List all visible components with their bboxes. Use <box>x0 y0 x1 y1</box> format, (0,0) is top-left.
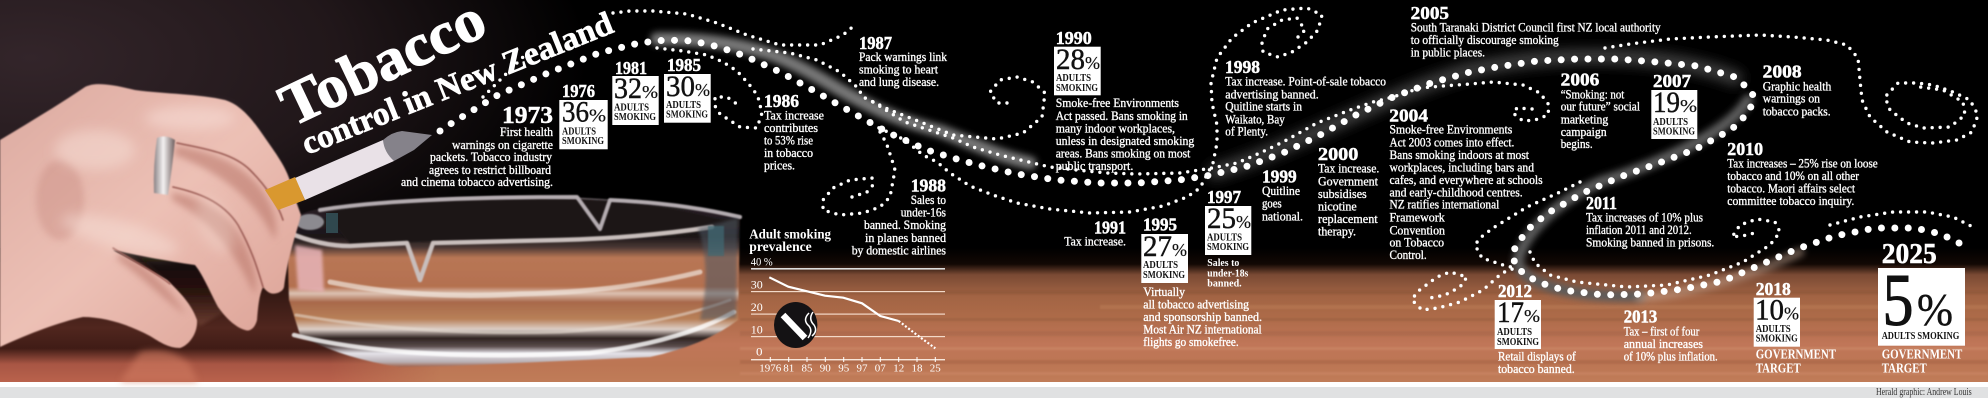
entry 1986: in tobacco <box>764 145 813 160</box>
main title <box>269 0 618 162</box>
entry 1990 with badge: areas. Bans smoking on most <box>1056 146 1191 161</box>
entry 2012 with badge: 2012 <box>1498 281 1532 301</box>
entry 1997 with badge: % <box>1236 212 1251 232</box>
entry 2013: annual increases <box>1624 336 1703 351</box>
ring <box>154 136 175 195</box>
entry 1981 with badge: ADULTS <box>614 102 649 114</box>
entry 1988: Sales to <box>911 192 946 207</box>
entry 2018 with badge: 10 <box>1755 294 1784 327</box>
entry 1973: 1973 <box>502 103 553 129</box>
entry 2006: our future” social <box>1561 99 1640 114</box>
entry 2008 <box>1763 62 1832 118</box>
entry 2013: of 10% plus inflation. <box>1624 348 1718 363</box>
dotted strand along timeline <box>873 82 1549 174</box>
entry 1998 <box>1225 57 1386 139</box>
dotted swirl lower left <box>1412 182 1580 310</box>
entry 2000: nicotine <box>1318 198 1357 213</box>
entry 1976 with badge <box>559 81 608 149</box>
entry 1987: 1987 <box>859 33 892 53</box>
entry 2004: Convention <box>1390 222 1445 237</box>
entry 2004: 2004 <box>1389 106 1428 126</box>
title line 2: control in New Zealand <box>297 6 618 162</box>
entry 1995 with badge: 1995 <box>1143 215 1177 235</box>
x axis labels: 25 <box>930 363 941 375</box>
entry 1990 with badge: Act passed. Bans smoking in <box>1056 108 1188 123</box>
x axis labels: 95 <box>838 363 850 375</box>
entry 2004: Bans smoking indoors at most <box>1390 147 1529 162</box>
y axis labels: 0 <box>756 345 762 359</box>
prevalence line actual <box>769 277 899 321</box>
dotted strand over title <box>483 11 856 97</box>
ashtray glass body <box>287 196 740 367</box>
entry 2004: Framework <box>1390 210 1445 225</box>
entry 1997 with badge: Sales to <box>1207 257 1240 269</box>
entry 1981 with badge: SMOKING <box>614 111 656 123</box>
x axis labels: 90 <box>820 363 831 375</box>
entry 2012 with badge: tobacco banned. <box>1498 361 1575 376</box>
entry 1987: and lung disease. <box>859 74 939 89</box>
entry 1981 with badge: 32 <box>614 72 642 105</box>
entry 2018 with badge: SMOKING <box>1756 332 1798 344</box>
entry 1986: prices. <box>764 158 795 172</box>
entry 2004 <box>1389 106 1543 262</box>
entry 1976 with badge: 36 <box>562 96 589 129</box>
chart heading: prevalence <box>749 240 812 255</box>
entry 1990 with badge: Smoke-free Environments <box>1056 95 1179 110</box>
entry 1981 with badge: % <box>642 82 658 102</box>
cigarette <box>265 131 432 210</box>
entry 2011: 2011 <box>1586 193 1617 213</box>
finger creases <box>113 143 283 287</box>
entry 1973: packets. Tobacco industry <box>430 149 552 164</box>
prevalence line projected <box>899 321 935 348</box>
entry 1973: First health <box>500 124 553 139</box>
dotted swirl by 1990 <box>753 49 1045 139</box>
entry 2011: inflation 2011 and 2012. <box>1586 222 1692 237</box>
entry 1990 with badge: 28 <box>1056 43 1085 76</box>
entry 2006: campaign <box>1561 124 1607 139</box>
entry 1990 with badge: ADULTS <box>1056 72 1091 84</box>
dotted strand lower right <box>1830 212 1973 227</box>
entry 2010: Tax increases – 25% rise on loose <box>1727 156 1878 171</box>
entry 1995 with badge: Most Air NZ international <box>1143 321 1262 336</box>
ashtray reflection left <box>295 245 324 292</box>
entry 2006: marketing <box>1561 111 1609 126</box>
entry 2000: 2000 <box>1318 144 1358 164</box>
entry 1999: 1999 <box>1262 166 1297 186</box>
entry 2006: “Smoking: not <box>1561 86 1625 101</box>
entry 2007 with badge <box>1651 71 1697 139</box>
entry 2007 with badge: 2007 <box>1653 71 1691 91</box>
entry 1997 with badge: banned. <box>1207 278 1242 290</box>
entry 2004: NZ ratifies international <box>1390 197 1500 212</box>
entry 2010 <box>1727 139 1878 208</box>
ash in ashtray <box>296 214 324 230</box>
dotted swirl by 1985 <box>657 48 762 128</box>
entry 1976 with badge: % <box>589 106 606 126</box>
hand highlights <box>55 106 242 264</box>
brown glow upper left <box>0 0 620 290</box>
entry 2012 with badge: 17 <box>1497 296 1524 329</box>
entry 1995 with badge: SMOKING <box>1143 269 1185 281</box>
dotted swirl far right <box>1605 35 1978 143</box>
x axis labels: 07 <box>875 363 886 375</box>
ashtray rim highlights <box>287 197 740 355</box>
entry 2018 with badge: GOVERNMENT <box>1756 348 1837 363</box>
entry 2007 with badge: ADULTS <box>1653 116 1688 128</box>
chart: adult smoking prevalence <box>749 228 945 375</box>
dotted swirl by 1988 and 1998 <box>823 8 1322 215</box>
entry 2004: Control. <box>1390 247 1427 262</box>
entry 2025 with badge: 5 <box>1882 260 1914 342</box>
entry 1986: contributes <box>764 120 818 135</box>
table surface <box>0 248 1988 382</box>
entry 1987: Pack warnings link <box>859 49 947 64</box>
entry 1998: 1998 <box>1225 57 1260 77</box>
entry 1985 with badge: 1985 <box>667 55 701 75</box>
entry 2006 <box>1561 70 1640 151</box>
entry 2004: and early-childhood centres. <box>1390 185 1523 200</box>
cigarette filter <box>265 177 305 210</box>
entry 2004: cafes, and everywhere at schools <box>1390 172 1543 187</box>
entry 2025 with badge: TARGET <box>1882 362 1927 377</box>
entry 1985 with badge: SMOKING <box>666 108 708 120</box>
entry 2013 <box>1624 307 1718 363</box>
entry 1990 with badge <box>1054 28 1195 173</box>
entry 2004: Act 2003 comes into effect. <box>1390 134 1514 150</box>
entry 1988: under-16s <box>901 205 946 220</box>
entry 1990 with badge: unless in designated smoking <box>1056 133 1195 148</box>
entry 2004: workplaces, including bars and <box>1390 160 1534 175</box>
entry 1981 with badge: 1981 <box>615 58 647 78</box>
entry 1988: in planes banned <box>865 230 946 245</box>
entry 1985 with badge: 30 <box>666 70 695 103</box>
entry 1988: 1988 <box>911 176 946 196</box>
smoke glow behind timeline <box>657 39 1800 298</box>
entry 1995 with badge <box>1141 215 1262 349</box>
entry 1973: agrees to restrict billboard <box>429 162 551 177</box>
entry 1986 <box>764 91 824 172</box>
entry 1995 with badge: all tobacco advertising <box>1143 297 1249 312</box>
photo: hand holding cigarette <box>0 84 301 382</box>
entry 1998: Quitline starts in <box>1225 99 1302 114</box>
entry 1991 <box>1064 217 1126 249</box>
entry 2010: 2010 <box>1727 139 1763 159</box>
entry 2004: Smoke-free Environments <box>1390 122 1512 137</box>
x axis labels: 81 <box>783 363 794 375</box>
entry 2007 with badge: 19 <box>1653 86 1680 119</box>
y axis labels: 40 % <box>751 255 773 269</box>
entry 1990 with badge: many indoor workplaces, <box>1056 120 1175 136</box>
entry 1976 with badge: SMOKING <box>562 135 604 147</box>
cigarette ash <box>383 131 432 161</box>
entry 1976 with badge: 1976 <box>562 81 595 101</box>
entry 2000: subsidises <box>1318 186 1367 201</box>
entry 1988: by domestic airlines <box>852 242 946 258</box>
entry 1973: warnings on cigarette <box>452 137 553 152</box>
entry 2008: 2008 <box>1763 62 1802 82</box>
entry 2007 with badge: % <box>1680 96 1697 116</box>
entry 2011 <box>1586 193 1714 250</box>
entry 1997 with badge: under-18s <box>1207 267 1249 279</box>
entry 2013: 2013 <box>1624 307 1657 327</box>
entry 2007 with badge: SMOKING <box>1653 126 1695 138</box>
dotted swirl lower centre <box>1530 219 1780 287</box>
entry 2000: therapy. <box>1318 223 1356 238</box>
entry 1988: banned. Smoking <box>864 217 946 232</box>
smoke trail: main large dotted line <box>440 40 1965 295</box>
entry 1976 with badge: ADULTS <box>562 125 596 137</box>
entry 1998: Tax increase. Point-of-sale tobacco <box>1225 74 1386 89</box>
entry 2012 with badge: Retail displays of <box>1498 349 1576 364</box>
entry 2011: Smoking banned in prisons. <box>1586 235 1714 250</box>
entry 1999 <box>1262 166 1303 223</box>
entry 1987 <box>859 33 947 89</box>
entry 2018 with badge: TARGET <box>1756 362 1801 377</box>
entry 1985 with badge: ADULTS <box>666 99 701 111</box>
entry 2012 with badge: ADULTS <box>1497 326 1532 338</box>
chart heading <box>749 228 831 255</box>
entry 1981 with badge <box>612 58 659 125</box>
y axis labels: 10 <box>751 323 763 337</box>
entry 2018 with badge: ADULTS <box>1756 323 1791 335</box>
x axis labels: 12 <box>893 363 904 375</box>
entry 1986: to 53% rise <box>764 133 813 148</box>
entry 2008: Graphic health <box>1763 78 1832 93</box>
entry 2000 <box>1318 144 1379 238</box>
entry 2018 with badge: 2018 <box>1756 279 1791 299</box>
entry 1999: national. <box>1262 208 1303 223</box>
entry 2025 with badge: ADULTS SMOKING <box>1882 330 1960 342</box>
smoke trail: small dotted swirls <box>483 8 1978 310</box>
entry 1995 with badge: ADULTS <box>1143 259 1178 271</box>
entry 1973: and cinema tobacco advertising. <box>401 174 553 189</box>
shadow between fingers <box>130 250 228 326</box>
entry 1985 with badge: % <box>695 80 710 100</box>
entry 1998: Waikato, Bay <box>1225 111 1285 126</box>
entry 2005: South Taranaki District Council first NZ local authority <box>1411 20 1661 35</box>
chart heading: Adult smoking <box>749 228 831 243</box>
entry 1973 <box>401 103 553 189</box>
entry 1997 with badge: 25 <box>1207 202 1236 235</box>
entry 1999: goes <box>1262 196 1282 211</box>
entry 1987: smoking to heart <box>859 62 938 77</box>
soft finger shadows <box>36 146 276 315</box>
entry 1995 with badge: flights go smokefree. <box>1143 334 1239 349</box>
dark table area under hand <box>0 262 440 382</box>
entry 2008: tobacco packs. <box>1763 103 1831 118</box>
entry 1990 with badge: 1990 <box>1056 28 1092 48</box>
entry 1995 with badge: % <box>1172 240 1187 260</box>
entry 1998: of Plenty. <box>1225 124 1268 139</box>
entry 2006: begins. <box>1561 136 1593 151</box>
entry 2010: tobacco and 10% on all other <box>1727 168 1860 183</box>
entry 1997 with badge: ADULTS <box>1207 232 1242 244</box>
entry 1985 with badge <box>664 55 711 123</box>
entry 1990 with badge: SMOKING <box>1056 82 1098 94</box>
entry 1995 with badge: and sponsorship banned. <box>1143 309 1262 324</box>
y axis labels: 30 <box>751 277 763 291</box>
entry 2018 with badge: % <box>1784 304 1799 324</box>
x axis labels: 97 <box>856 363 868 375</box>
ashtray teal notch <box>708 226 724 256</box>
entry 2010: tobacco. Maori affairs select <box>1727 181 1855 196</box>
entry 1999: Quitline <box>1262 183 1300 198</box>
entry 2011: Tax increases of 10% plus <box>1586 210 1703 225</box>
x axis labels: 1976 <box>759 363 782 375</box>
entry 2005 <box>1411 3 1661 60</box>
entry 2018 with badge <box>1754 279 1837 377</box>
bottom footer strip <box>0 387 1988 398</box>
entry 2025 with badge <box>1878 239 1965 377</box>
entry 1990 with badge: public transport. <box>1056 158 1133 173</box>
entry 1998: advertising banned. <box>1225 86 1319 101</box>
entry 2000: Government <box>1318 173 1378 188</box>
entry 2025 with badge: % <box>1917 284 1953 335</box>
entry 2012 with badge: % <box>1524 306 1540 326</box>
entry 1995 with badge: Virtually <box>1143 284 1185 299</box>
entry 2025 with badge: GOVERNMENT <box>1882 348 1963 363</box>
entry 2025 with badge: 2025 <box>1882 239 1937 270</box>
entry 2005: to officially discourage smoking <box>1411 32 1559 47</box>
entry 2005: in public places. <box>1411 45 1485 60</box>
x axis labels <box>759 363 941 375</box>
photo: ashtray <box>287 196 740 367</box>
entry 1997 with badge: 1997 <box>1207 187 1241 207</box>
entry 1997 with badge <box>1205 187 1251 290</box>
entry 1997 with badge: SMOKING <box>1207 241 1249 253</box>
entry 2000: Tax increase. <box>1318 161 1379 176</box>
x axis labels: 85 <box>802 363 813 375</box>
icon: smoking cigarette <box>774 302 817 348</box>
entry 2005: 2005 <box>1411 3 1449 23</box>
entry 1991: 1991 <box>1094 217 1126 237</box>
y axis labels: 20 <box>751 300 763 314</box>
entry 1986: 1986 <box>764 91 799 111</box>
entry 2012 with badge <box>1495 281 1576 376</box>
entry 1991: Tax increase. <box>1064 234 1126 249</box>
entry 2004: on Tobacco <box>1390 235 1444 250</box>
entry 2010: committee tobacco inquiry. <box>1727 193 1854 208</box>
cigarette paper <box>295 140 394 200</box>
ashtray interior dark <box>325 198 728 244</box>
ashtray glass right side <box>698 218 738 320</box>
wood grain streaks <box>740 291 1988 375</box>
teal front notch <box>326 213 338 233</box>
y axis labels <box>751 255 773 359</box>
x axis labels: 18 <box>912 363 923 375</box>
entry 2013: Tax – first of four <box>1624 323 1700 338</box>
entry 1990 with badge: % <box>1085 53 1100 73</box>
entry 1986: Tax increase <box>764 108 824 122</box>
entry 1988 <box>852 176 946 258</box>
entry 1995 with badge: 27 <box>1143 230 1172 263</box>
entry 2008: warnings on <box>1763 91 1820 106</box>
finger reflection on table <box>120 350 198 382</box>
hand silhouette <box>0 84 301 348</box>
entry 2000: replacement <box>1318 211 1378 226</box>
entry 2012 with badge: SMOKING <box>1497 336 1539 348</box>
entry 2006: 2006 <box>1561 70 1599 90</box>
